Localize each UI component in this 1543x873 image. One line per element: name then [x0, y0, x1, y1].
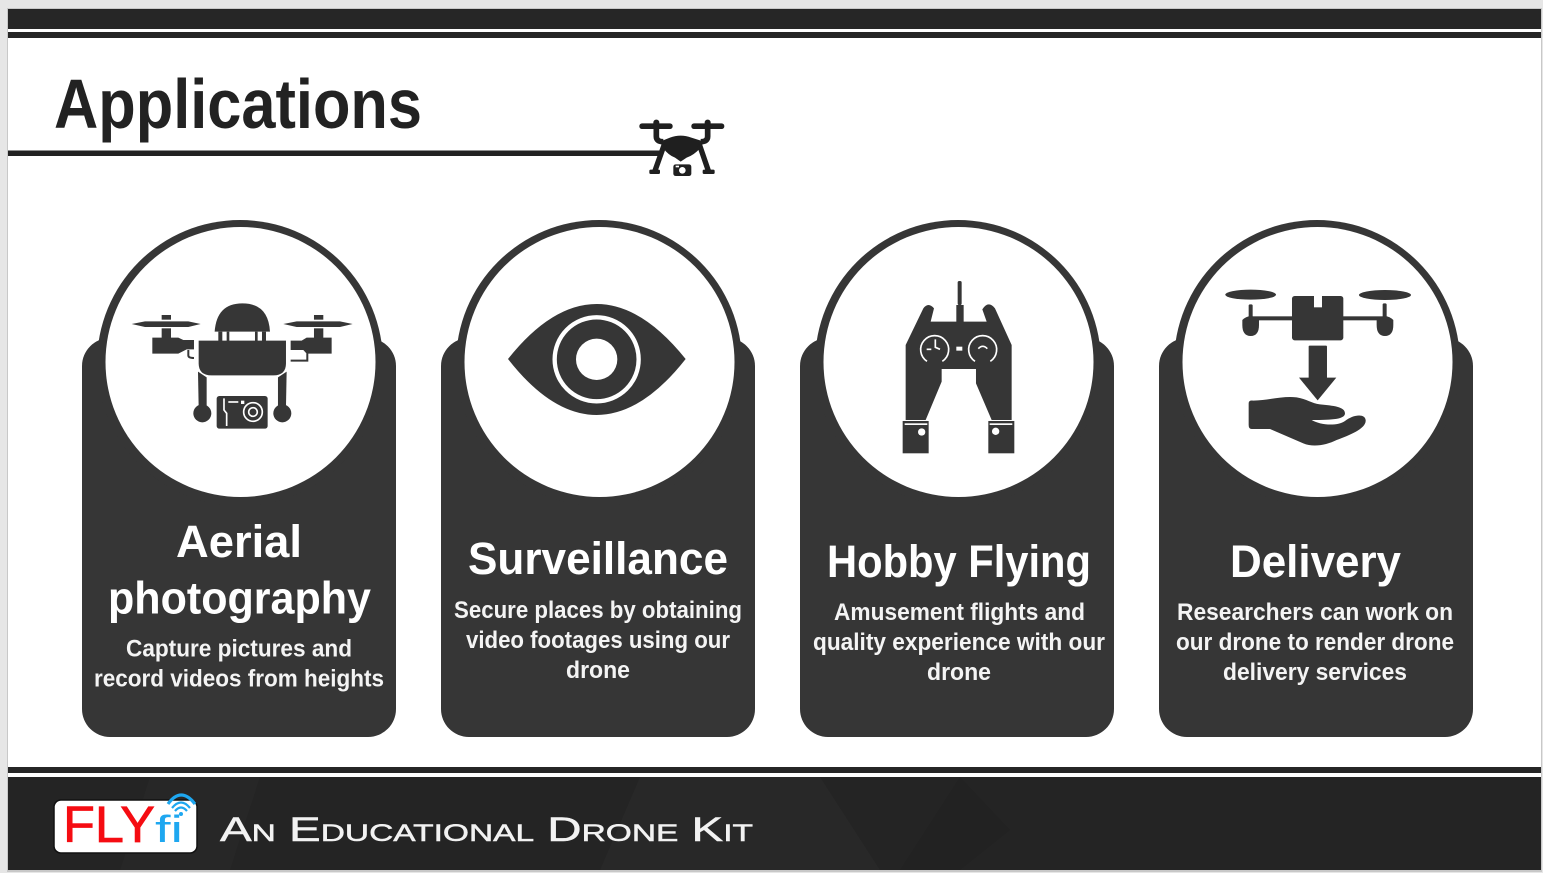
- logo letters: FLY: [63, 796, 155, 853]
- white circle: [1182, 227, 1452, 497]
- description: Capture pictures and: [126, 636, 352, 662]
- card background: [1159, 220, 1473, 737]
- heading: [108, 516, 371, 624]
- icon: eye: [508, 304, 686, 415]
- description: [94, 636, 384, 692]
- card background: [800, 220, 1114, 737]
- description: video footages using our: [466, 627, 730, 654]
- description: [813, 599, 1105, 686]
- footer band: [8, 767, 1541, 870]
- description: [1176, 599, 1454, 686]
- description: record videos from heights: [94, 666, 384, 692]
- panel: aerial photography: [82, 220, 396, 737]
- icon: drone delivery: [1225, 290, 1411, 445]
- panel: surveillance: [441, 220, 755, 737]
- logo: FLYfi: [54, 795, 197, 853]
- white circle: [824, 227, 1094, 497]
- heading: Hobby Flying: [827, 536, 1091, 587]
- heading: Aerial: [176, 516, 302, 567]
- footer tagline: An Educational Drone Kit: [220, 811, 753, 849]
- heading: Surveillance: [468, 533, 728, 584]
- description: Secure places by obtaining: [454, 597, 742, 624]
- icon: small drone: [639, 120, 724, 176]
- description: Amusement flights and: [834, 599, 1085, 626]
- description: drone: [927, 659, 991, 686]
- icon: camera drone: [132, 303, 353, 429]
- description: our drone to render drone: [1176, 629, 1454, 656]
- white circle: [106, 227, 376, 497]
- panel: delivery: [1159, 220, 1473, 737]
- title: Applications: [54, 65, 422, 143]
- heading: Delivery: [1230, 536, 1401, 587]
- icon: wifi signal: [168, 795, 195, 816]
- top header band: [8, 9, 1541, 38]
- card background: [441, 220, 755, 737]
- icon: remote controller: [903, 281, 1014, 453]
- description: delivery services: [1223, 659, 1407, 686]
- card background: [82, 220, 396, 737]
- white circle: [464, 227, 734, 497]
- description: [454, 597, 742, 684]
- description: quality experience with our: [813, 629, 1105, 656]
- heading: photography: [108, 572, 371, 624]
- title underline: [8, 150, 662, 156]
- description: Researchers can work on: [1177, 599, 1453, 626]
- logo suffix: fi: [155, 809, 183, 851]
- panel: hobby flying: [800, 220, 1114, 737]
- description: drone: [566, 657, 630, 684]
